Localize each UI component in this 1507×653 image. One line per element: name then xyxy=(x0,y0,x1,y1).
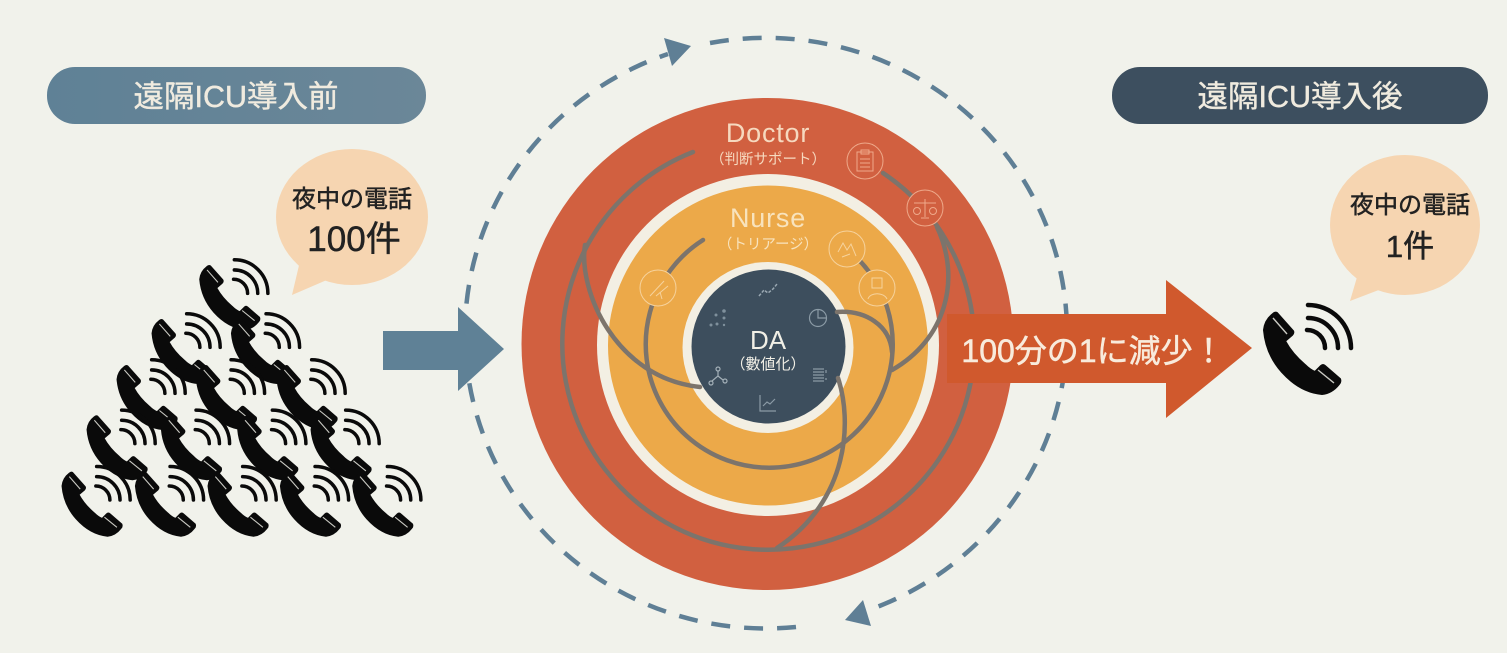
header: before: 遠隔ICU導入前 xyxy=(133,80,339,114)
icon: single ringing phone xyxy=(1264,305,1351,394)
icon: list xyxy=(813,369,827,381)
callout: after xyxy=(1330,155,1480,301)
header: after xyxy=(1112,67,1488,124)
label: Nurse xyxy=(718,203,818,253)
icon: scatter dots xyxy=(710,309,726,326)
label: DA xyxy=(730,325,806,373)
callout: before: 夜中の電話 xyxy=(292,186,412,213)
header: before xyxy=(47,67,426,124)
icon: scales xyxy=(907,190,943,226)
header: after: 遠隔ICU導入後 xyxy=(1197,80,1403,114)
circle: DA xyxy=(692,270,846,424)
ring: Nurse xyxy=(608,186,928,506)
label: Nurse: （トリアージ） xyxy=(718,236,818,253)
label: DA: DA xyxy=(750,325,787,355)
icon: pie chart xyxy=(810,310,826,326)
label: Doctor: （判断サポート） xyxy=(710,151,826,168)
label: Nurse: Nurse xyxy=(730,203,806,233)
connecting curves xyxy=(562,152,974,550)
callout: before xyxy=(276,149,428,295)
icon: nurse portrait xyxy=(859,270,895,306)
label: DA: （數値化） xyxy=(730,356,806,373)
arrow: result: 100分の1に減少！ xyxy=(961,333,1225,369)
callout: after: 1件 xyxy=(1386,229,1434,264)
callout: before: 100件 xyxy=(307,220,401,259)
arrow: before to cycle xyxy=(383,307,504,391)
ring: Doctor xyxy=(522,98,1014,590)
arrow: result xyxy=(947,280,1252,418)
dashed cycle ring xyxy=(465,38,1067,628)
icon: line trend xyxy=(759,284,777,296)
icon: hands xyxy=(829,231,865,267)
icon: network xyxy=(709,367,727,385)
icon: clipboard xyxy=(847,143,883,179)
label: Doctor: Doctor xyxy=(726,118,810,148)
icon: stethoscope xyxy=(640,270,676,306)
concentric circles diagram xyxy=(522,98,1014,590)
callout: after: 夜中の電話 xyxy=(1350,192,1470,219)
label: Doctor xyxy=(710,118,826,168)
icon: axis chart xyxy=(760,395,776,411)
icon: pile of ringing phones xyxy=(62,260,421,536)
